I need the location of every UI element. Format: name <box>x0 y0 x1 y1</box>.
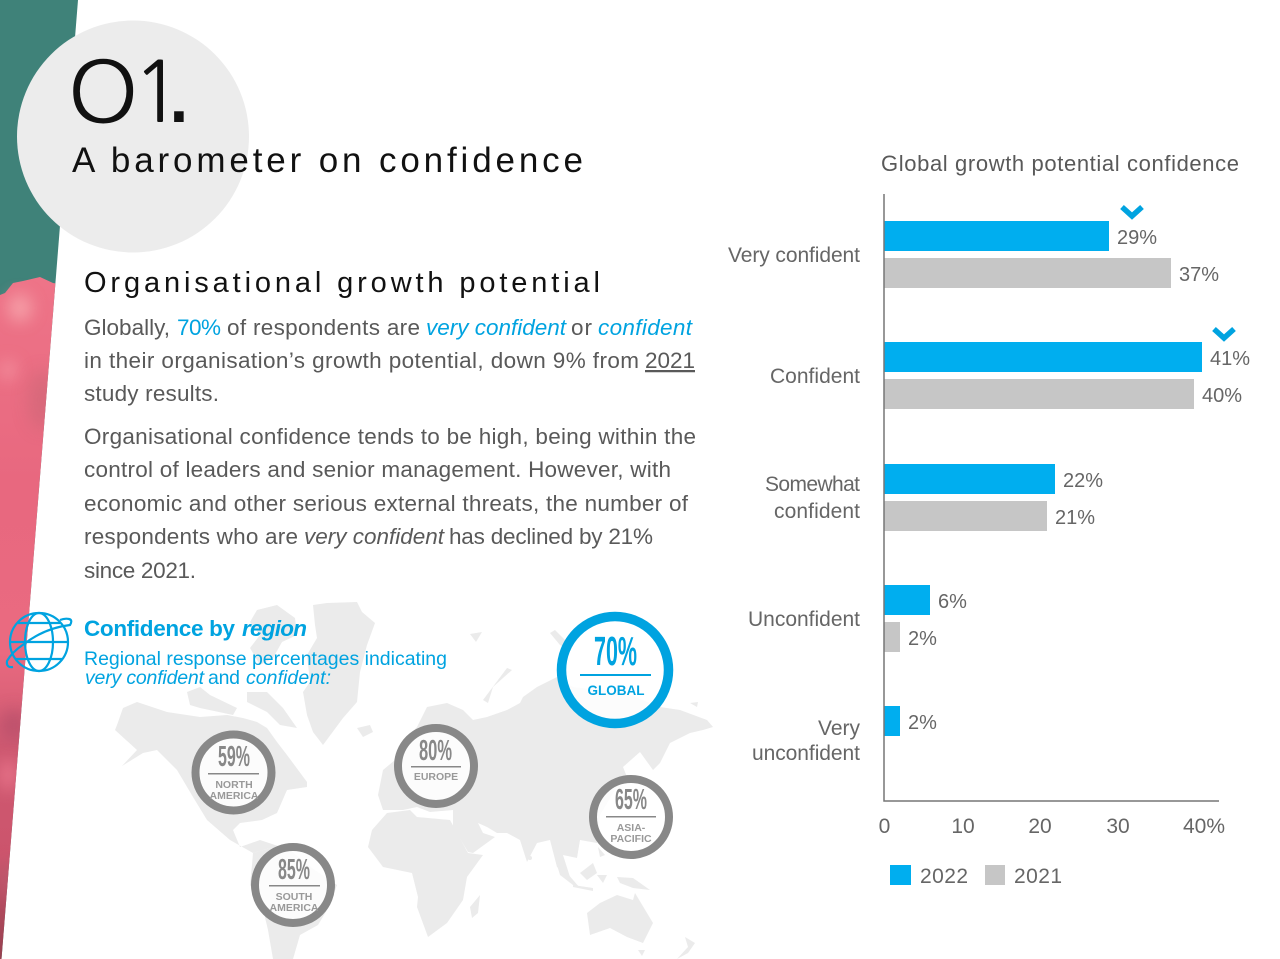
category labels: Somewhat <box>765 473 860 496</box>
axis ticks: 20 <box>1028 815 1052 838</box>
badge: south america 85%: AMERICA <box>270 902 319 914</box>
badge: south america 85%: SOUTH <box>276 891 312 903</box>
icon: globe <box>7 613 71 671</box>
section number: 1 <box>132 51 183 135</box>
legend: 2022 <box>920 865 968 888</box>
category labels: unconfident <box>752 742 860 765</box>
value labels: 2% <box>908 628 937 650</box>
paragraph: global confidence: in their organisation’s growth potential, down 9% from <box>84 348 639 373</box>
paragraph: organisational confidence: respondents who are <box>84 524 298 549</box>
section number <box>67 32 193 144</box>
badge: global 70%: GLOBAL <box>588 683 644 698</box>
chart title: Global growth potential confidence <box>881 151 1239 176</box>
category labels: Confident <box>770 365 860 388</box>
category labels <box>728 244 860 765</box>
title: A barometer on confidence <box>72 141 583 180</box>
heading: confidence by region: Confidence by <box>84 616 235 641</box>
badge: north america 59%: 59% <box>218 741 250 773</box>
axes <box>884 194 1219 801</box>
value labels: 37% <box>1179 264 1219 286</box>
value labels <box>908 227 1250 734</box>
paragraph: global confidence: 2021 <box>645 348 695 373</box>
heading: confidence by region: region <box>242 616 307 641</box>
decorative photo strip <box>0 0 80 959</box>
bar chart <box>728 194 1250 838</box>
value labels: 21% <box>1055 507 1095 529</box>
paragraph: organisational confidence: control of leaders and senior management. However, with <box>84 457 671 482</box>
badge: north america 59%: NORTH <box>215 779 253 791</box>
paragraph: global confidence: Globally, <box>84 315 170 340</box>
heading: confidence by region <box>84 616 307 641</box>
regional subtitle: and <box>208 667 240 689</box>
icon: down chevron confident <box>1214 329 1234 338</box>
category labels: Very <box>818 717 860 740</box>
paragraph: organisational confidence: Organisational confidence tends to be high, being within the <box>84 424 696 449</box>
world map <box>115 602 713 959</box>
badge: asia-pacific 65%: PACIFIC <box>610 833 652 845</box>
paragraph: global confidence: very confident <box>426 315 568 340</box>
legend <box>890 865 1062 888</box>
paragraph: organisational confidence <box>84 424 696 583</box>
legend: 2021 <box>1014 865 1062 888</box>
category labels: Unconfident <box>748 608 860 631</box>
badge: europe 80%: 80% <box>419 735 452 767</box>
category labels: Very confident <box>728 244 860 267</box>
category labels: confident <box>774 500 860 523</box>
paragraph: organisational confidence: economic and other serious external threats, the number of <box>84 491 689 516</box>
badge: south america 85% <box>255 847 331 923</box>
axis ticks: 0 <box>879 815 890 838</box>
heading: organisational growth potential: Organisational growth potential <box>84 267 600 299</box>
paragraph: global confidence: or <box>571 315 592 340</box>
axis ticks: 30 <box>1106 815 1130 838</box>
badge: asia-pacific 65%: ASIA- <box>617 822 646 834</box>
badge: asia-pacific 65%: 65% <box>615 784 647 816</box>
badge: global 70% <box>562 616 668 724</box>
value labels: 22% <box>1063 470 1103 492</box>
paragraph: organisational confidence: has declined by 21% <box>449 524 653 549</box>
axis ticks: 10 <box>951 815 975 838</box>
axis ticks <box>879 815 1225 838</box>
badge: asia-pacific 65% <box>593 779 669 855</box>
regional subtitle <box>84 648 447 689</box>
badge: europe 80%: EUROPE <box>414 771 458 783</box>
bars 2022 <box>884 221 1202 736</box>
bars 2021 <box>884 258 1194 652</box>
badge: north america 59%: AMERICA <box>210 790 259 802</box>
paragraph: global confidence: study results. <box>84 381 219 406</box>
regional subtitle: very confident <box>85 667 206 689</box>
badge: north america 59% <box>196 734 272 810</box>
value labels: 40% <box>1202 385 1242 407</box>
regional subtitle: confident: <box>246 667 331 689</box>
icon: down chevron very confident <box>1122 207 1142 216</box>
paragraph: global confidence: of respondents are <box>227 315 420 340</box>
section number: O <box>67 51 139 135</box>
badge: europe 80% <box>398 728 474 804</box>
value labels: 6% <box>938 591 967 613</box>
paragraph: global confidence <box>84 315 695 406</box>
title circle <box>17 20 249 252</box>
badge: south america 85%: 85% <box>278 854 310 886</box>
badge: global 70%: 70% <box>594 628 637 674</box>
value labels: 41% <box>1210 348 1250 370</box>
value labels: 29% <box>1117 227 1157 249</box>
paragraph: global confidence: confident <box>598 315 694 340</box>
regional subtitle: Regional response percentages indicating <box>84 648 447 670</box>
section number: . <box>165 32 193 144</box>
paragraph: organisational confidence: very confident <box>304 524 446 549</box>
paragraph: organisational confidence: since 2021. <box>84 558 196 583</box>
axis ticks: 40% <box>1183 815 1225 838</box>
value labels: 2% <box>908 712 937 734</box>
paragraph: global confidence: 70% <box>177 315 221 340</box>
